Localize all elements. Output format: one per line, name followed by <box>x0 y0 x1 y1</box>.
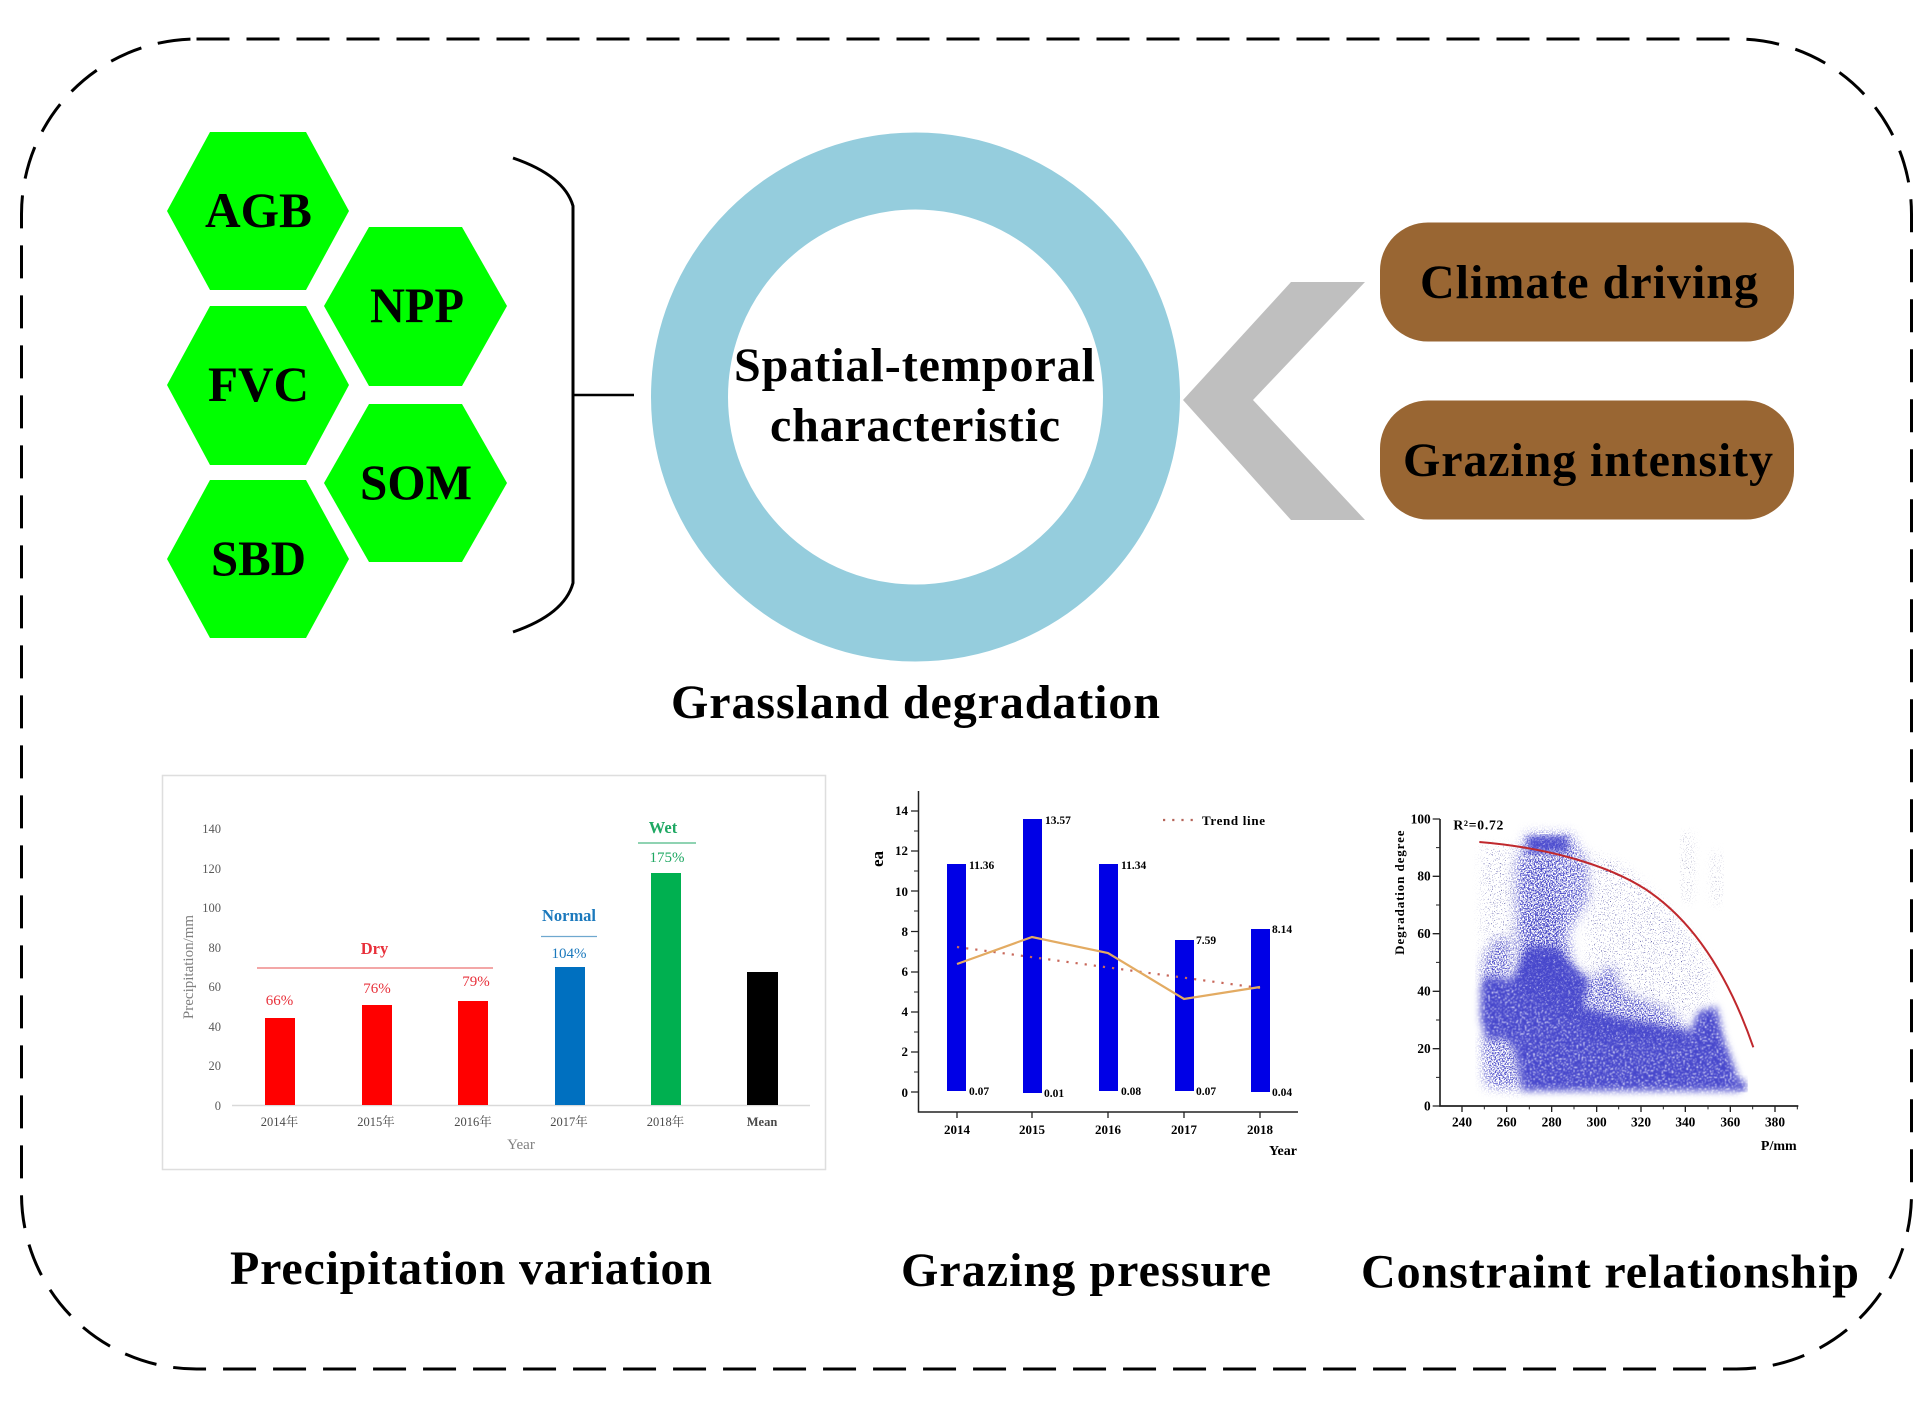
y axis labels: 14 <box>895 803 908 818</box>
x axis title: P/mm <box>1761 1139 1797 1154</box>
group label: dry: 76% <box>363 981 391 997</box>
scatter points <box>1481 833 1747 1091</box>
x axis labels <box>261 1114 777 1129</box>
y axis labels: 0 <box>1424 1098 1431 1113</box>
group label: dry: 66% <box>266 993 293 1009</box>
hexagon: FVC <box>167 306 349 465</box>
y axis labels: 100 <box>1411 811 1431 826</box>
axes <box>1433 819 1798 1112</box>
group label: wet <box>638 818 696 866</box>
value labels: 0.07 <box>1196 1086 1216 1098</box>
x axis labels: 2015 <box>1019 1122 1046 1137</box>
axes <box>911 791 1298 1118</box>
bars <box>947 819 1270 1093</box>
y axis labels: 100 <box>202 901 221 915</box>
x axis labels: 2018年 <box>647 1114 684 1129</box>
value labels: 0.07 <box>969 1086 989 1098</box>
hexagon: NPP <box>324 227 507 386</box>
x axis labels: 2017年 <box>550 1114 588 1129</box>
panel: constraint scatter chart <box>1392 811 1798 1154</box>
y axis labels: 12 <box>895 843 908 858</box>
y axis labels: 80 <box>1417 869 1431 884</box>
hexagon: SBD: SBD <box>211 530 306 586</box>
hexagon: SOM: SOM <box>360 454 472 510</box>
y axis labels: 120 <box>202 862 221 876</box>
hexagon: AGB <box>167 132 349 290</box>
pill: climate driving <box>1380 222 1794 342</box>
y axis title: Degradation degree <box>1392 830 1407 955</box>
panel: grazing pressure bar chart <box>868 791 1298 1159</box>
value labels: 13.57 <box>1045 815 1071 827</box>
legend: trend line: Trend line <box>1202 813 1265 828</box>
x axis labels: 280 <box>1542 1115 1562 1130</box>
hexagon: FVC: FVC <box>208 356 309 412</box>
x axis labels: 260 <box>1497 1115 1517 1130</box>
y axis labels: 40 <box>208 1020 221 1034</box>
y axis labels: 40 <box>1417 984 1431 999</box>
y axis labels: 0 <box>215 1099 221 1113</box>
pill: grazing intensity: Grazing intensity <box>1403 434 1773 487</box>
y axis labels: 6 <box>902 964 908 979</box>
group label: dry: Dry <box>361 939 389 958</box>
hexagon: SBD <box>167 480 349 638</box>
heading: grassland degradation: Grassland degradation <box>671 676 1160 729</box>
x axis labels: 240 <box>1452 1115 1472 1130</box>
x axis labels: Mean <box>747 1115 777 1129</box>
orange line <box>957 937 1260 999</box>
value labels: 11.34 <box>1121 860 1146 872</box>
pill: grazing intensity <box>1380 400 1794 520</box>
arrow: chevron pointing to ring <box>1183 282 1365 520</box>
pill: climate driving: Climate driving <box>1420 256 1758 309</box>
y axis labels: 10 <box>895 884 908 899</box>
hexagon: AGB: AGB <box>205 182 312 238</box>
y axis labels: 2 <box>902 1044 908 1059</box>
y axis labels <box>1411 811 1431 1113</box>
group label: dry <box>257 939 493 1009</box>
heading: constraint relationship: Constraint relationship <box>1361 1246 1859 1298</box>
bars <box>265 873 778 1105</box>
ring: spatial-temporal characteristic: characteristic <box>770 399 1060 452</box>
hexagon: SOM <box>324 404 507 562</box>
y axis title: ea <box>868 850 887 867</box>
x axis labels: 2015年 <box>357 1114 395 1129</box>
legend: trend line <box>1163 813 1265 828</box>
x axis labels: 320 <box>1631 1115 1651 1130</box>
y axis labels <box>895 803 908 1100</box>
x axis labels: 2014年 <box>261 1114 298 1129</box>
group label: normal: Normal <box>542 906 596 925</box>
x axis labels <box>1452 1115 1785 1130</box>
y axis labels: 0 <box>902 1085 908 1100</box>
value labels <box>969 815 1292 1100</box>
x axis labels: 360 <box>1720 1115 1741 1130</box>
x axis labels: 340 <box>1675 1115 1696 1130</box>
group label: normal: 104% <box>552 946 586 962</box>
y axis labels: 60 <box>1417 926 1431 941</box>
y axis labels: 20 <box>208 1059 221 1073</box>
value labels: 0.01 <box>1044 1088 1064 1100</box>
y axis labels: 140 <box>202 822 221 836</box>
x axis title: Year <box>507 1137 535 1153</box>
bracket connector <box>513 158 634 632</box>
value labels: 7.59 <box>1196 935 1216 947</box>
y axis labels <box>202 822 221 1113</box>
x axis labels <box>944 1122 1274 1137</box>
x axis labels: 2016 <box>1095 1122 1122 1137</box>
x axis labels: 380 <box>1765 1115 1785 1130</box>
hexagon: NPP: NPP <box>370 277 464 333</box>
ring: spatial-temporal characteristic <box>690 171 1142 623</box>
fitted curve <box>1479 842 1753 1047</box>
y axis labels: 80 <box>208 941 221 955</box>
heading: precipitation variation: Precipitation variation <box>230 1242 712 1295</box>
x axis labels: 2017 <box>1171 1122 1198 1137</box>
panel: precipitation bar chart <box>162 776 826 1170</box>
group label: wet: Wet <box>649 818 678 837</box>
x axis labels: 2018 <box>1247 1122 1274 1137</box>
x axis title: Year <box>1269 1144 1297 1159</box>
ring: spatial-temporal characteristic: Spatial-temporal <box>734 339 1095 392</box>
y axis labels: 8 <box>902 924 908 939</box>
y axis labels: 20 <box>1417 1041 1431 1056</box>
heading: grazing pressure: Grazing pressure <box>901 1244 1271 1297</box>
x axis labels: 300 <box>1587 1115 1607 1130</box>
group label: normal <box>541 906 597 962</box>
value labels: 8.14 <box>1272 924 1292 936</box>
trend line <box>957 947 1260 988</box>
value labels: 11.36 <box>969 860 994 872</box>
y axis labels: 4 <box>902 1004 908 1019</box>
x axis labels: 2016年 <box>454 1114 492 1129</box>
group label: wet: 175% <box>650 850 684 866</box>
r squared label: R²=0.72 <box>1453 817 1504 832</box>
x axis labels: 2014 <box>944 1122 970 1137</box>
group label: dry: 79% <box>462 974 490 990</box>
y axis title: Precipitation/mm <box>181 915 197 1019</box>
y axis labels: 60 <box>208 980 221 994</box>
value labels: 0.08 <box>1121 1086 1141 1098</box>
panel: grassland indicators hexagons <box>167 132 507 638</box>
value labels: 0.04 <box>1272 1087 1292 1099</box>
